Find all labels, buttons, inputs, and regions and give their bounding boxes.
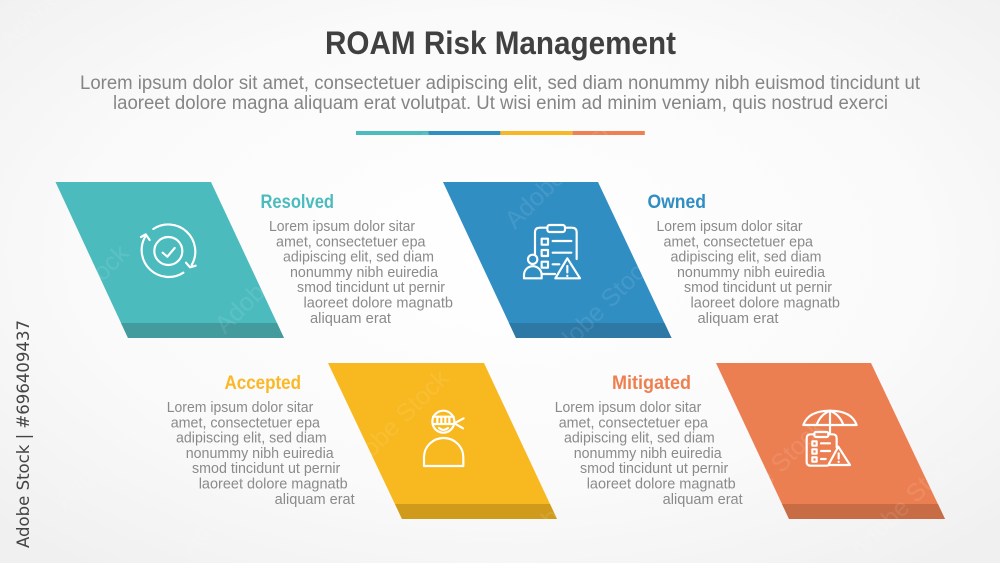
watermark pattern: Adobe Stock	[844, 444, 965, 563]
heading: Accepted: Accepted	[224, 373, 301, 394]
panel: Mitigated	[555, 363, 945, 519]
heading: Owned: Owned	[648, 192, 706, 213]
text block: Accepted: nonummy nibh euiredia	[186, 446, 335, 462]
text block: Owned: aliquam erat	[698, 311, 778, 327]
base band: Accepted	[395, 504, 557, 519]
base band: Mitigated	[782, 504, 945, 519]
heading: Mitigated: Mitigated	[612, 373, 691, 394]
text block: Owned: amet, consectetuer epa	[664, 234, 814, 250]
text block: Accepted: adipiscing elit, sed diam	[176, 431, 327, 447]
text block: Mitigated: laoreet dolore magnatb	[587, 476, 736, 492]
text block: Resolved: amet, consectetuer epa	[276, 234, 426, 250]
watermark pattern: Adobe Stock	[49, 394, 170, 514]
icon: rotating arrows with check	[141, 224, 196, 277]
text block: Accepted	[167, 400, 355, 508]
text block: Resolved: nonummy nibh euiredia	[290, 265, 439, 281]
watermark pattern: Adobe Stock	[14, 239, 135, 359]
watermark pattern: Adobe Stock	[829, 124, 950, 244]
watermark pattern: Adobe Stock	[504, 444, 625, 563]
watermark pattern: Adobe Stock	[539, 249, 660, 369]
text block: Owned: nonummy nibh euiredia	[677, 265, 826, 281]
parallelogram: Owned	[443, 182, 672, 338]
base band: Owned	[509, 323, 672, 338]
text block: Accepted: laoreet dolore magnatb	[199, 476, 348, 492]
watermark pattern: Adobe Stock	[499, 114, 620, 234]
heading: Resolved: Resolved	[260, 192, 334, 213]
subtitle text: laoreet dolore magna aliquam erat volutpat. Ut wisi enim ad minim veniam, quis nostrud exerci	[113, 93, 888, 114]
text block: Mitigated: smod tincidunt ut pernir	[580, 461, 728, 477]
text block: Resolved: adipiscing elit, sed diam	[283, 250, 434, 266]
watermark pattern: Adobe Stock	[709, 414, 830, 534]
icon: person with headband	[424, 411, 464, 466]
text block: Mitigated: amet, consectetuer epa	[559, 415, 709, 431]
text block: Owned: Lorem ipsum dolor sitar	[656, 219, 803, 235]
parallelogram: Accepted	[328, 363, 557, 519]
watermark pattern: Adobe Stock	[874, 254, 995, 374]
panel: Resolved	[56, 182, 453, 338]
text block: Owned: laoreet dolore magnatb	[690, 296, 840, 312]
panel: Owned	[443, 182, 840, 338]
text block: Accepted: smod tincidunt ut pernir	[192, 461, 340, 477]
watermark pattern: Adobe Stock	[369, 74, 490, 194]
text block: Resolved: Lorem ipsum dolor sitar	[269, 219, 415, 235]
subtitle text: Lorem ipsum dolor sit amet, consectetuer adipiscing elit, sed diam nonummy nibh euismod tincidunt ut	[80, 73, 921, 94]
text block: Accepted: amet, consectetuer epa	[171, 415, 321, 431]
base band: Resolved	[121, 323, 284, 338]
watermark pattern: Adobe Stock	[334, 364, 455, 484]
icon: umbrella over checklist with warning	[803, 411, 857, 466]
stock id side label: Adobe Stock | #696409437	[14, 320, 33, 548]
text block: Owned: adipiscing elit, sed diam	[670, 250, 822, 266]
text block: Mitigated: adipiscing elit, sed diam	[564, 431, 715, 447]
watermark pattern: Adobe Stock	[34, 59, 155, 179]
title: ROAM Risk Management	[325, 25, 676, 61]
text block: Resolved: aliquam erat	[310, 311, 391, 327]
parallelogram: Mitigated	[716, 363, 945, 519]
text block: Owned: smod tincidunt ut pernir	[684, 280, 832, 296]
text block: Resolved	[269, 219, 453, 327]
parallelogram: Resolved	[56, 182, 284, 338]
watermark pattern: Adobe Stock	[209, 219, 330, 339]
text block: Accepted: Lorem ipsum dolor sitar	[167, 400, 313, 416]
watermark pattern: Adobe Stock	[174, 439, 295, 559]
text block: Mitigated	[555, 400, 743, 508]
accent divider bar	[356, 131, 645, 135]
text block: Mitigated: nonummy nibh euiredia	[574, 446, 723, 462]
text block: Owned	[656, 219, 840, 327]
text block: Mitigated: aliquam erat	[663, 492, 743, 508]
text block: Accepted: aliquam erat	[275, 492, 355, 508]
text block: Mitigated: Lorem ipsum dolor sitar	[555, 400, 701, 416]
text block: Resolved: laoreet dolore magnatb	[304, 296, 453, 312]
panel: Accepted	[167, 363, 557, 519]
subtitle text	[80, 73, 921, 114]
text block: Resolved: smod tincidunt ut pernir	[297, 280, 445, 296]
icon: checklist with person and warning	[524, 225, 580, 278]
